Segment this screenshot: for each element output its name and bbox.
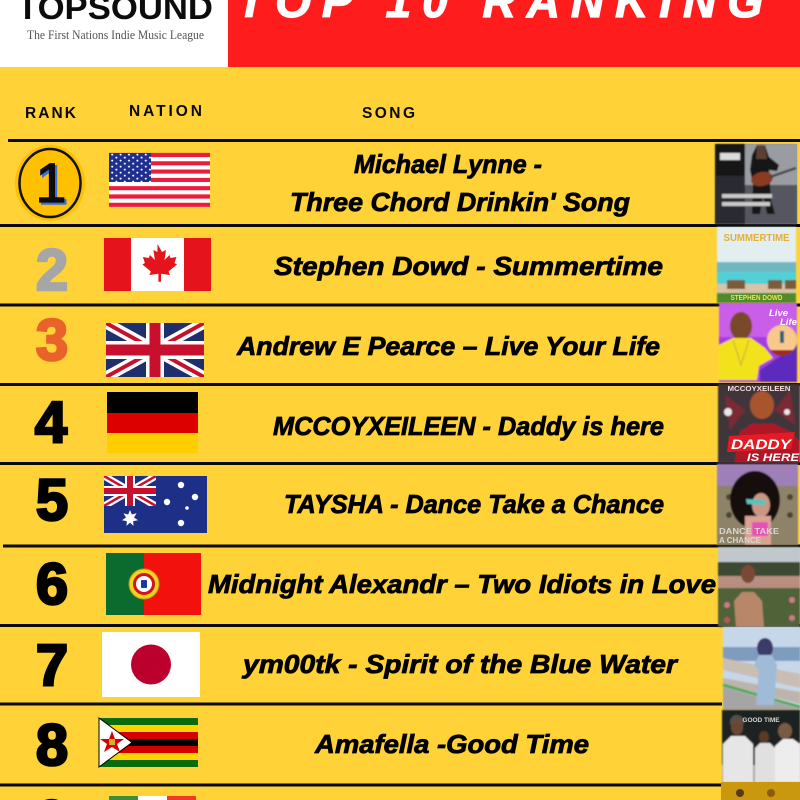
- song title: MCCOYXEILEEN - Daddy is here: [273, 411, 664, 441]
- nation heading: NATION: [129, 103, 202, 120]
- album art: Good Time: GOOD TIME: [742, 717, 780, 724]
- rank 4: 4: [35, 390, 67, 455]
- flag: Portugal: [106, 553, 201, 615]
- rank 1 badge: 1: [37, 153, 69, 216]
- song title: Stephen Dowd - Summertime: [274, 251, 663, 281]
- album art: Michael Lynne: [715, 144, 797, 224]
- album art: Live Your Life: Life: [780, 317, 798, 328]
- flag: Canada: [104, 238, 211, 291]
- album art: Dance Take a Chance: [717, 464, 798, 545]
- flag: Zimbabwe: [99, 718, 198, 767]
- album art: Two Idiots in Love: [718, 547, 800, 627]
- row 7: [36, 627, 800, 710]
- album art: Daddy is here: [718, 384, 800, 464]
- row 1: [15, 144, 797, 224]
- header: title banner: [228, 0, 800, 67]
- song title: Midnight Alexandr – Two Idiots in Love: [208, 569, 716, 599]
- row 9: [36, 782, 800, 800]
- header: logo panel: [0, 0, 228, 67]
- rank 3: 3: [36, 308, 68, 373]
- song heading: SONG: [362, 105, 415, 122]
- flag: Australia: [104, 476, 207, 533]
- flag: Germany: [107, 392, 198, 453]
- rank 6: 6: [36, 552, 68, 617]
- rank 1 badge: [15, 145, 85, 221]
- logo tagline: The First Nations Indie Music League: [27, 28, 204, 42]
- album art: Daddy is here: DADDY: [731, 436, 793, 452]
- album art: Summertime: STEPHEN DOWD: [730, 295, 782, 302]
- row 3: [36, 303, 798, 382]
- song title: [290, 149, 630, 217]
- song title: Amafella -Good Time: [314, 729, 589, 759]
- song title: TAYSHA - Dance Take a Chance: [284, 489, 664, 519]
- song title: Three Chord Drinkin' Song: [290, 187, 630, 217]
- album art: Spirit of the Blue Water: [723, 627, 800, 710]
- rank 7: 7: [36, 633, 68, 698]
- album art: Daddy is here: IS HERE: [747, 452, 800, 464]
- album art: Dance Take a Chance: A CHANCE: [719, 536, 762, 545]
- flag: UK: [106, 323, 204, 377]
- row 6: [36, 547, 800, 627]
- row 4: [35, 384, 800, 464]
- flag: Italy: [109, 796, 196, 800]
- row 8: [36, 710, 800, 782]
- album art: row 9: [721, 782, 800, 800]
- flag: USA: [109, 153, 210, 207]
- album art: Summertime: SUMMERTIME: [724, 232, 790, 244]
- album art: Good Time: [722, 710, 800, 782]
- song title: Andrew E Pearce – Live Your Life: [236, 331, 660, 361]
- column headings: [25, 103, 415, 122]
- row 5: [36, 464, 798, 545]
- album art: Summertime: [717, 227, 796, 303]
- song title: ym00tk - Spirit of the Blue Water: [241, 649, 679, 679]
- row 2: [36, 227, 796, 303]
- rank heading: RANK: [25, 105, 77, 122]
- song title: Michael Lynne -: [354, 149, 542, 179]
- album art: Dance Take a Chance: DANCE TAKE: [719, 527, 780, 536]
- rank 2: 2: [36, 238, 68, 303]
- flag: Japan: [102, 632, 200, 697]
- rank 1 badge: 1: [35, 151, 67, 214]
- rank 8: 8: [36, 713, 68, 778]
- album art: Live Your Life: Live: [769, 308, 789, 319]
- rank 5: 5: [36, 468, 68, 533]
- album art: Live Your Life: [719, 303, 798, 382]
- album art: Daddy is here: MCCOYXEILEEN: [728, 384, 790, 393]
